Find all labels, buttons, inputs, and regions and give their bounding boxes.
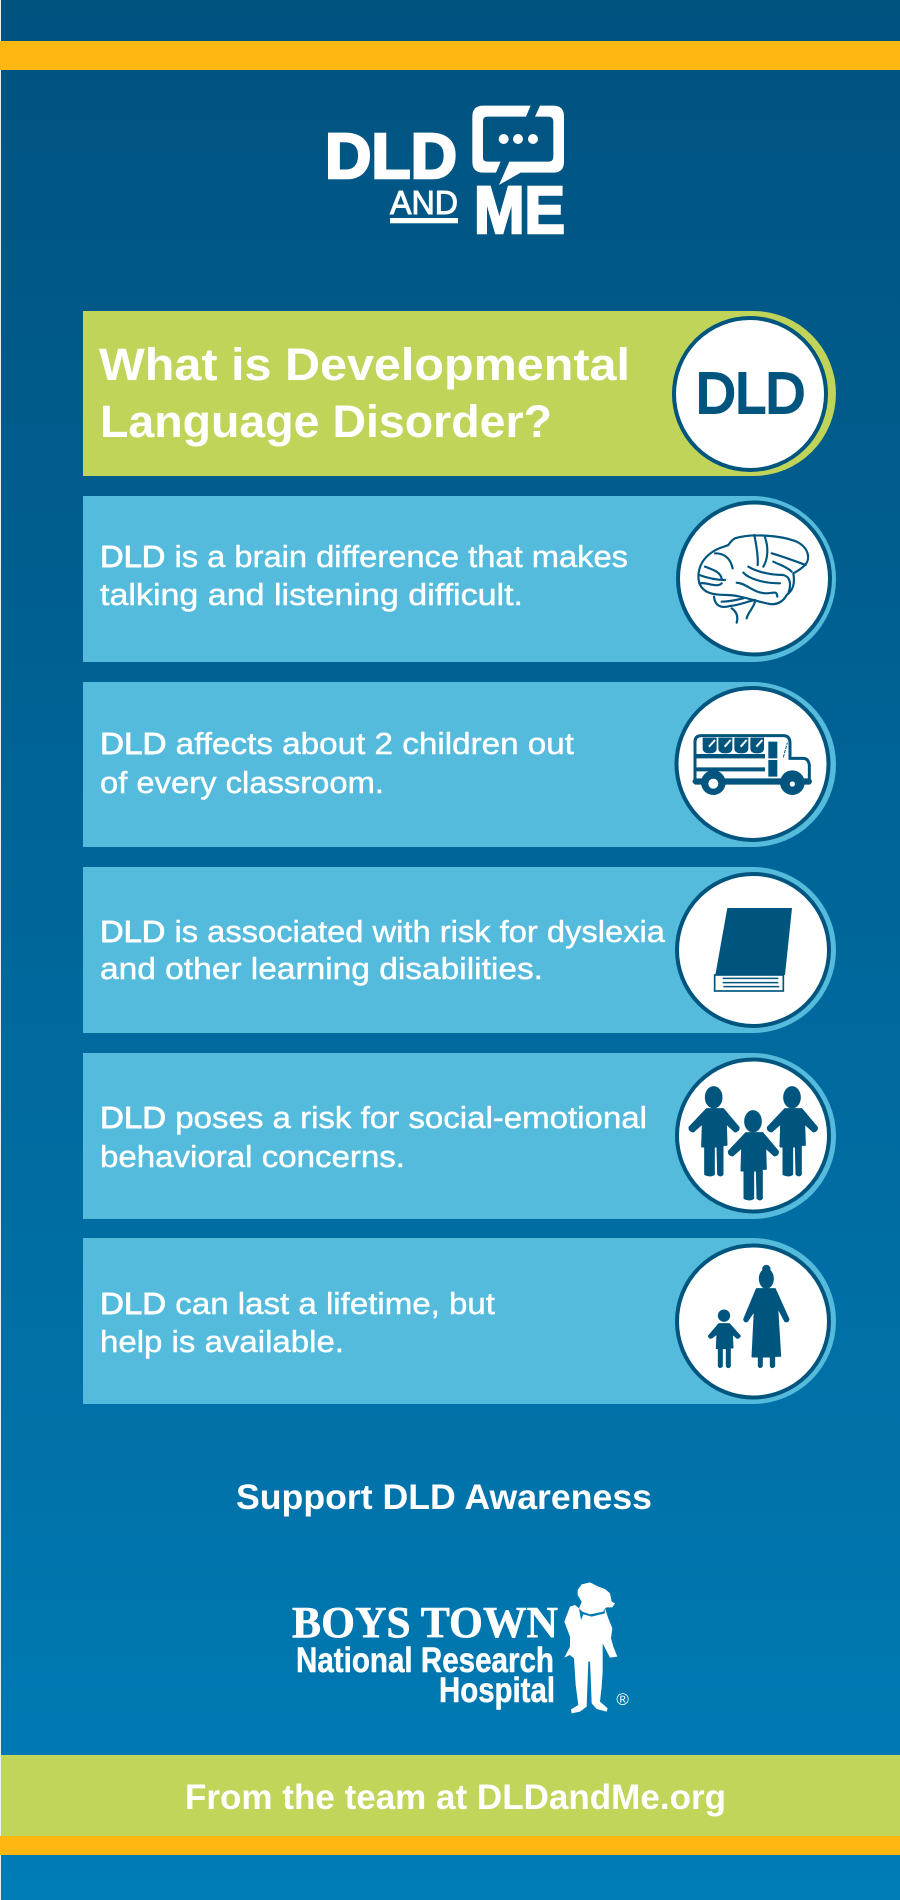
text: lifetime: DLD can last a lifetime, but bbox=[100, 1286, 495, 1321]
icon: DLD circle: DLD bbox=[696, 362, 805, 426]
text: classroom: DLD affects about 2 children out bbox=[100, 726, 574, 761]
top yellow band bbox=[0, 41, 900, 70]
heading text: Language Disorder? bbox=[100, 396, 552, 447]
icon: adult carrying child bbox=[564, 1582, 617, 1713]
panel: dyslexia: and other learning disabilities. bbox=[100, 951, 543, 986]
panel: social-emotional: behavioral concerns. bbox=[100, 1139, 405, 1174]
logo text: BOYS TOWN bbox=[292, 1598, 558, 1647]
panel: brain difference: talking and listening difficult. bbox=[100, 577, 523, 612]
icon: school bus bbox=[676, 688, 828, 840]
heading: Support DLD Awareness: Support DLD Awareness bbox=[236, 1478, 652, 1517]
logo word ME: ME bbox=[474, 173, 565, 248]
icon: woman and child bbox=[677, 1246, 829, 1398]
icon: brain bbox=[678, 502, 830, 654]
panel: dyslexia bbox=[83, 867, 836, 1033]
text: dyslexia: DLD is associated with risk for dyslexia bbox=[100, 914, 666, 949]
icon: DLD circle bbox=[674, 318, 826, 470]
panel: heading bbox=[83, 311, 836, 476]
panel: brain difference bbox=[83, 496, 836, 662]
logo: DLD and Me bbox=[325, 106, 565, 248]
text: social-emotional: DLD poses a risk for social-emotional bbox=[100, 1100, 647, 1135]
logo word AND: AND bbox=[390, 184, 458, 221]
icon: speech bubble bbox=[472, 106, 564, 185]
logo: Boys Town National Research Hospital: Hospital bbox=[439, 1671, 555, 1710]
text: brain difference: DLD is a brain difference that makes bbox=[100, 539, 628, 574]
panel: social-emotional bbox=[83, 1053, 836, 1219]
logo: Boys Town National Research Hospital bbox=[292, 1582, 629, 1713]
icon: book bbox=[677, 874, 829, 1026]
logo: Boys Town National Research Hospital: National Research bbox=[296, 1641, 554, 1680]
registered mark: ® bbox=[616, 1690, 629, 1709]
panel: classroom bbox=[83, 682, 836, 847]
heading text: What is Developmental bbox=[99, 339, 630, 390]
bottom yellow band bbox=[0, 1836, 900, 1855]
icon: three children bbox=[677, 1060, 829, 1212]
panel: lifetime: help is available. bbox=[100, 1324, 344, 1359]
footer band bbox=[1, 1755, 900, 1836]
panel: classroom: of every classroom. bbox=[100, 765, 384, 800]
panel: lifetime bbox=[83, 1238, 836, 1404]
logo word DLD: DLD bbox=[325, 120, 457, 192]
footer text: From the team at DLDandMe.org bbox=[185, 1778, 726, 1817]
